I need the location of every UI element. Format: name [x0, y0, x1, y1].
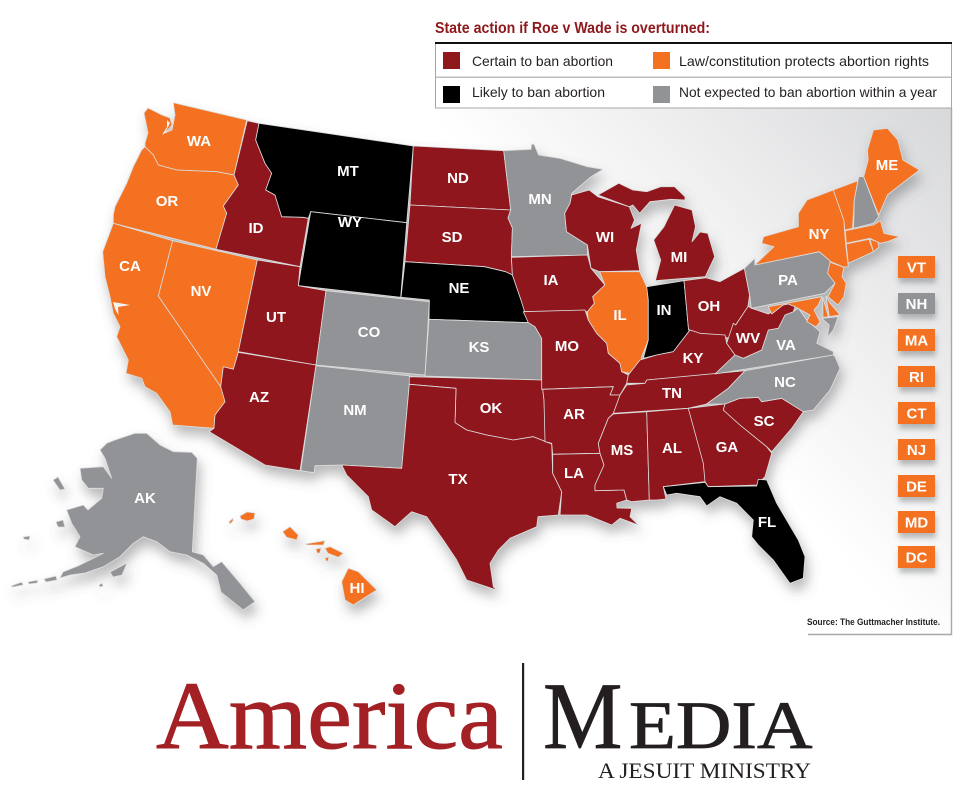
badge: DC: [898, 546, 935, 568]
state: Pennsylvania: [744, 252, 835, 308]
state: Texas: [342, 384, 562, 590]
state: Arkansas: [543, 387, 620, 454]
badge: MA: [898, 329, 935, 351]
state: Indiana: IN: [656, 302, 672, 319]
state: South Dakota: SD: [442, 229, 463, 246]
state: California: [103, 223, 225, 428]
state: Ohio: OH: [698, 298, 720, 315]
state: Virginia: [715, 308, 838, 374]
legend: protects rights: Law/constitution protects abortion rights: [679, 53, 929, 69]
logo wordmark: Media: [543, 664, 812, 769]
state: Wyoming: WY: [338, 214, 362, 231]
logo divider: [522, 663, 524, 780]
state: Kentucky: [627, 330, 735, 383]
state: Hawaii: [229, 512, 377, 605]
state: Massachusetts: [846, 221, 900, 243]
state: Alabama: AL: [662, 440, 682, 457]
state: Oklahoma: OK: [480, 400, 502, 417]
state: Ohio: [684, 268, 750, 338]
state: Arkansas: AR: [563, 406, 585, 423]
map of US states: [11, 103, 920, 610]
state: Virginia: VA: [776, 337, 796, 354]
state: California: CA: [119, 258, 141, 275]
badge: RI: [898, 366, 935, 387]
badge: RI: RI: [909, 369, 924, 386]
state: Florida: FL: [758, 514, 776, 531]
state: New Hampshire: [854, 177, 879, 228]
state: Connecticut: [846, 239, 873, 263]
badge: MD: [898, 511, 935, 533]
state: North Carolina: [707, 355, 840, 412]
state: Nevada: NV: [191, 283, 211, 300]
state: Oregon: OR: [156, 193, 178, 210]
state: Minnesota: [504, 144, 603, 257]
badge: VT: VT: [907, 260, 926, 276]
state: Michigan: MI: [671, 249, 687, 266]
state: West Virginia: [727, 304, 795, 358]
badge: NH: [898, 293, 935, 314]
state: North Dakota: ND: [447, 170, 469, 187]
badge: VT: [898, 256, 935, 278]
state: Idaho: ID: [248, 220, 264, 237]
state: Delaware: [826, 296, 840, 316]
state: Alaska: AK: [134, 490, 156, 507]
state: West Virginia: WV: [736, 330, 760, 347]
source note: Source: The Guttmacher Institute.: [807, 617, 940, 628]
state: South Carolina: [723, 397, 803, 452]
state: Oregon: [113, 147, 238, 249]
state: Tennessee: TN: [662, 385, 682, 402]
state: Colorado: CO: [358, 324, 381, 341]
badge: MA: MA: [905, 332, 928, 350]
state: North Dakota: [410, 146, 511, 210]
legend box: [435, 42, 952, 108]
state: Kentucky: KY: [683, 350, 703, 367]
badge: MD: MD: [905, 514, 928, 532]
state: Pennsylvania: PA: [778, 272, 798, 289]
state: New Mexico: NM: [343, 402, 367, 419]
state: North Carolina: NC: [774, 374, 796, 391]
state: Utah: UT: [266, 309, 286, 326]
state: Wyoming: [298, 212, 407, 297]
state: New Mexico: [301, 366, 410, 473]
state: Iowa: [511, 255, 605, 312]
state: Mississippi: MS: [611, 442, 633, 459]
state: Georgia: GA: [716, 439, 738, 456]
state: Louisiana: [553, 453, 638, 525]
state: Illinois: IL: [613, 307, 627, 324]
state: Washington: WA: [187, 133, 211, 150]
state: Tennessee: [613, 371, 745, 413]
logo wordmark: Media: EDIA: [629, 687, 812, 763]
badge: DE: DE: [906, 478, 927, 496]
state: Minnesota: MN: [528, 191, 552, 208]
state: New York: [755, 190, 848, 267]
state: Mississippi: [595, 412, 649, 502]
state: Idaho: [216, 121, 308, 267]
map panel background: [0, 108, 952, 634]
state: Florida: [663, 479, 805, 583]
legend: likely to ban: Likely to ban abortion: [472, 84, 605, 100]
logo wordmark: America: America: [156, 663, 503, 769]
state: Arizona: AZ: [249, 389, 269, 406]
state: Maine: [864, 128, 920, 215]
state: Rhode Island: [870, 239, 879, 252]
badge: CT: CT: [906, 406, 926, 422]
state: Colorado: [316, 291, 429, 375]
badge: DC: DC: [906, 550, 927, 566]
state: Hawaii: HI: [350, 580, 364, 597]
state: Georgia: [688, 404, 772, 487]
legend: certain to ban: Certain to ban abortion: [472, 53, 613, 69]
state: Kansas: KS: [469, 339, 489, 356]
logo: America Media: [156, 663, 812, 783]
state: Texas: TX: [448, 471, 468, 488]
state: Wisconsin: WI: [596, 229, 614, 246]
state: South Dakota: [405, 205, 512, 275]
badge: CT: [898, 402, 935, 424]
state: Alabama: [647, 408, 705, 500]
state badges: [898, 256, 935, 568]
state: Indiana: [643, 281, 690, 358]
state: Montana: [256, 123, 413, 223]
state: Missouri: [523, 310, 628, 395]
state: Vermont: [833, 181, 858, 230]
state: Utah: [238, 260, 326, 365]
legend: likely to ban: [443, 84, 605, 103]
state: Arizona: [209, 352, 316, 471]
badge: NJ: NJ: [907, 442, 926, 459]
badge: NH: NH: [906, 296, 927, 313]
state: Montana: MT: [337, 163, 359, 180]
state: Iowa: IA: [544, 272, 559, 289]
logo tagline: A JESUIT MINISTRY: [598, 758, 811, 783]
state: Missouri: MO: [555, 338, 579, 355]
state: Kansas: [425, 319, 542, 380]
state: Louisiana: LA: [564, 465, 584, 482]
state: Nebraska: [401, 262, 529, 323]
state: Maryland: [768, 297, 828, 327]
state: Nevada: [158, 241, 257, 387]
legend title: State action if Roe v Wade is overturned:: [435, 20, 710, 37]
state: Oklahoma: [409, 377, 552, 444]
water inlets: Puget Sound and San Francisco Bay: [113, 120, 170, 315]
badge: DE: [898, 475, 935, 497]
state: New York: NY: [809, 226, 829, 243]
state: Wisconsin: [565, 190, 642, 272]
legend: not expected to ban: Not expected to ban abortion within a year: [679, 84, 937, 100]
state: Nebraska: NE: [449, 280, 469, 297]
state: Maine: ME: [876, 157, 898, 174]
state: Alaska: [11, 433, 255, 610]
state: South Carolina: SC: [754, 413, 775, 430]
badge: NJ: [898, 439, 935, 460]
state: New Jersey: [828, 262, 846, 305]
state: Illinois: [587, 272, 648, 373]
logo wordmark: Media: M: [543, 664, 622, 769]
state: Michigan: [598, 183, 715, 281]
state: Washington: [144, 103, 247, 175]
